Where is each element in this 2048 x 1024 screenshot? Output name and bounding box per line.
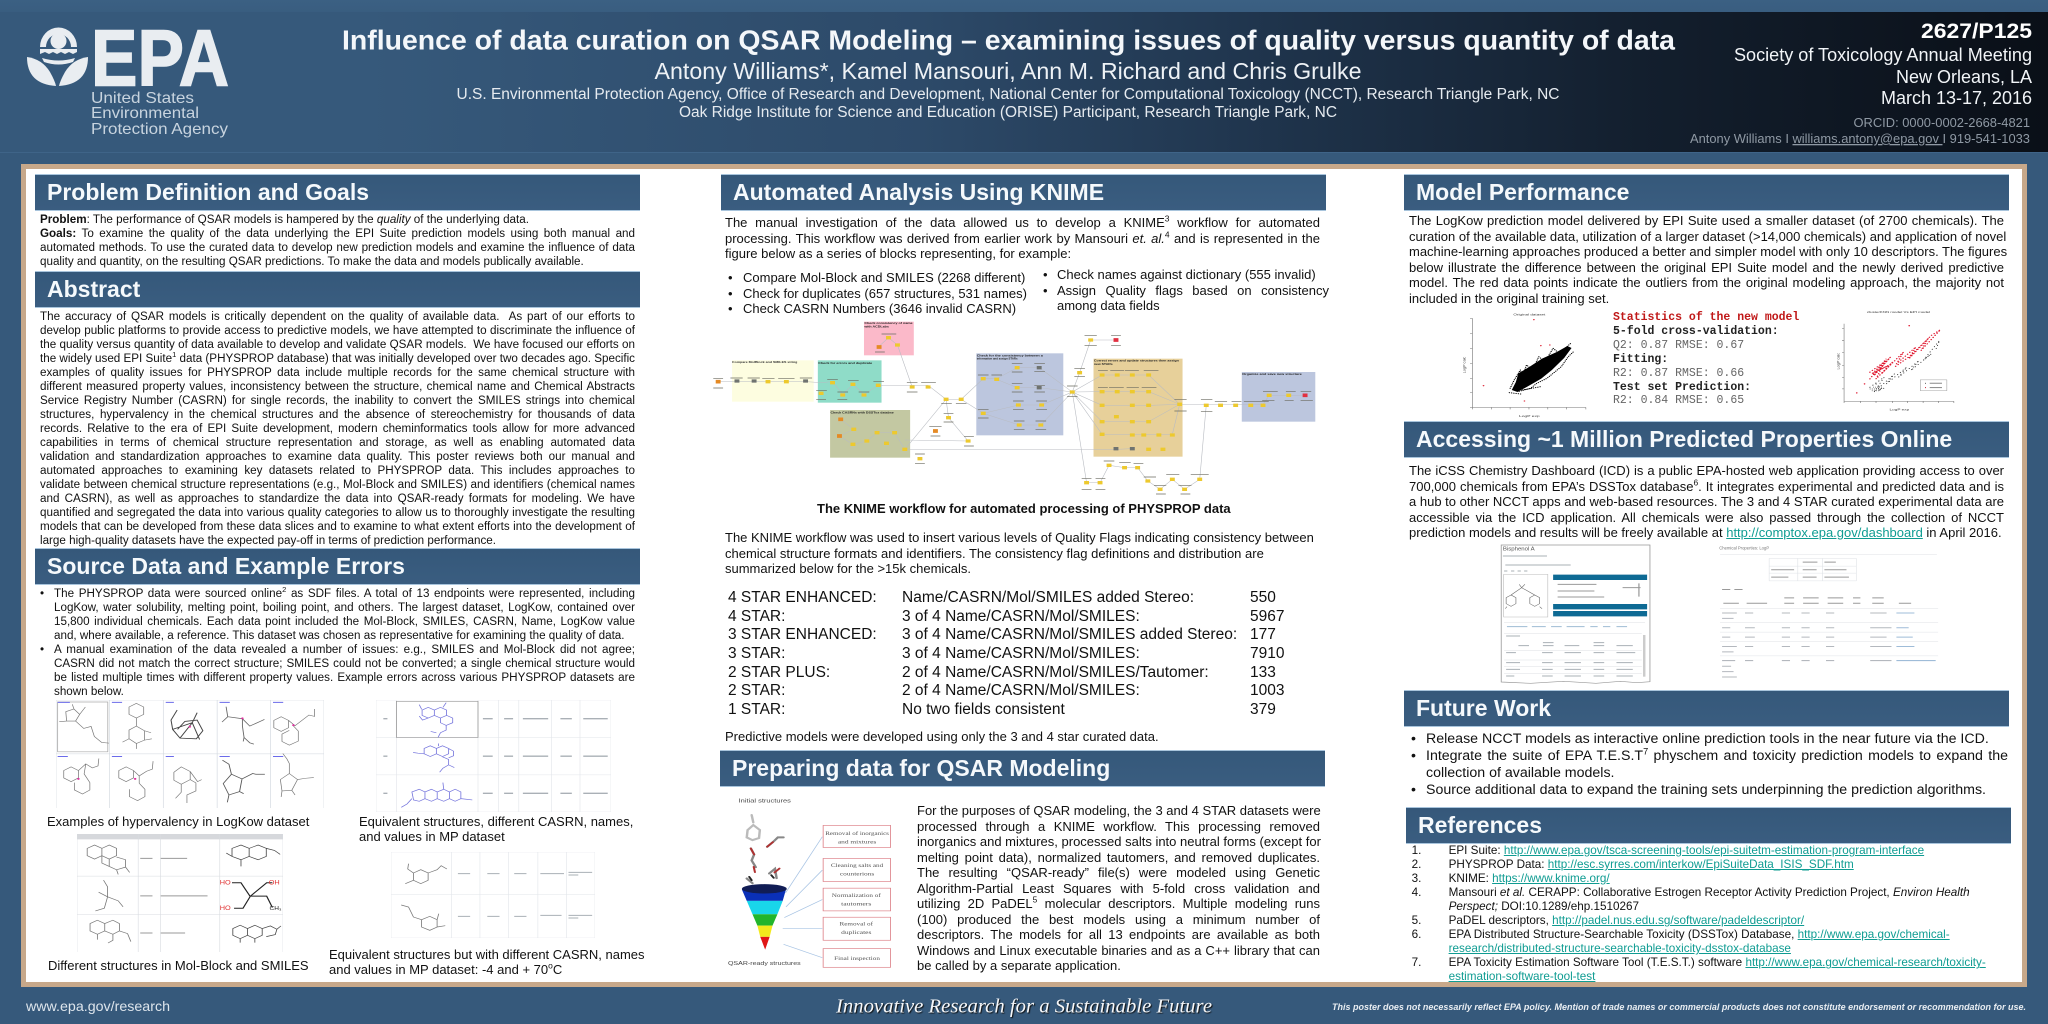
panel: preparing data for QSAR modeling — [720, 750, 1325, 973]
text: model performance: model. The red data points indicate the outliers from the original modeling approach, the majority not — [1409, 275, 2004, 290]
table: star ratings: 379 — [1250, 701, 1276, 718]
figure: QSAR funnel — [728, 798, 891, 968]
affiliations: U.S. Environmental Protection Agency, Office of Research and Development, National Center for Computational Toxicology (NCCT), Research Triangle Park, NC — [456, 86, 1560, 103]
panel: source data and example errors: • — [40, 587, 44, 600]
list: future work: Source additional data to expand the training sets underpinning the prediction algorithms. — [1426, 782, 1986, 798]
text: model performance: curation of the available data, utilization of a larger dataset (>14,000 chemicals) and application of novel — [1409, 229, 2006, 244]
text: source bullets: shown below. — [54, 685, 124, 698]
table: star ratings: 3 STAR: — [728, 645, 785, 662]
text: abstract: examples of quality issues for PHYSPROP data include multiple records for the same chemical structure with — [40, 366, 635, 379]
conference info — [1690, 20, 2032, 146]
caption: different values: and values in MP dataset: -4 and + 70oC — [329, 961, 562, 977]
heading: accessing properties: Accessing ~1 Million Predicted Properties Online — [1416, 426, 1952, 452]
agency name: United States — [91, 90, 194, 107]
contact details: Antony Williams I williams.antony@epa.gov I 919-541-1033 — [1690, 131, 2030, 146]
text: source bullets: be listed multiple times with different property values. Example errors across various PHYSPROP datasets are — [54, 671, 635, 684]
chart: original dataset scatter: LogP exp — [1519, 414, 1540, 418]
affiliations — [456, 86, 1560, 121]
text: abstract: the widely used EPI Suite1 data (PHYSPROP database) that was initially developed over two decades ago. Specific — [40, 350, 635, 365]
text: problem and goals: Problem: The performance of QSAR models is hampered by the quality of the underlying data. — [40, 213, 529, 226]
panel: automated analysis using KNIME: • — [728, 286, 733, 301]
panel: automated analysis using KNIME: • — [1043, 283, 1048, 298]
panel: automated analysis using KNIME — [713, 174, 1329, 744]
poster title and authors — [342, 24, 1676, 121]
panel: references: 1. — [1412, 844, 1421, 857]
panel: problem definition and goals — [35, 174, 640, 268]
header band — [0, 12, 2048, 153]
affiliations: Oak Ridge Institute for Science and Education (ORISE) Participant, Research Triangle Park, NC — [679, 104, 1337, 121]
figure: Mol-Block versus SMILES table: HO — [220, 880, 231, 886]
list: checks right — [1043, 267, 1329, 313]
text: abstract: automated approaches to examining key datasets related to PHYSPROP data. This includes approaches to — [40, 464, 635, 477]
caption: different values — [329, 946, 645, 977]
heading: model performance: Model Performance — [1416, 179, 1629, 205]
table: star ratings: 7910 — [1250, 645, 1284, 662]
workflow block: organize: Organize and save new structure — [1242, 372, 1302, 376]
text: abstract: Service Registry Number (CASRN) for single records, the inability to convert the SMILES strings into chemical — [40, 394, 635, 407]
stats: new model statistics: Statistics of the new model — [1613, 311, 1799, 324]
caption: Mol-Block versus SMILES: Different structures in Mol-Block and SMILES — [48, 958, 309, 973]
caption: hypervalency: Examples of hypervalency in LogKow dataset — [47, 814, 309, 828]
workflow block: correct errors — [1094, 359, 1183, 457]
text: source bullets — [40, 585, 635, 698]
figure: equivalent structures with different values — [391, 852, 595, 938]
list: references: estimation-software-tool-test — [1449, 970, 1595, 983]
text: problem and goals: quality and quantity, on the resulting QSAR predictions. To make the data and models publically available. — [40, 255, 584, 268]
EPA logo — [27, 20, 229, 138]
heading: KNIME: Automated Analysis Using KNIME — [733, 179, 1104, 205]
text: quality flags: summarized below for the >15k chemicals. — [725, 561, 971, 576]
meeting details: March 13-17, 2016 — [1881, 88, 2032, 108]
meeting details: New Orleans, LA — [1896, 67, 2032, 87]
heading: model performance — [1404, 174, 2009, 211]
text: abstract: validation and standardization approaches to examine data quality. This poster reviews both our manual and — [40, 450, 635, 463]
funnel label top: Initial structures — [739, 798, 791, 804]
text: problem and goals: Goals: To examine the quality of the data underlying the EPI Suite prediction models using both manual and — [40, 227, 635, 240]
funnel arrows — [783, 837, 822, 958]
workflow block: errors — [818, 360, 882, 403]
list: checks left: Check for duplicates (657 structures, 531 names) — [743, 286, 1027, 301]
text: model performance: The LogKow prediction model delivered by EPI Suite used a smaller dataset (of 2700 chemicals). The — [1409, 213, 2004, 228]
stats: new model statistics: 5-fold cross-validation: — [1613, 325, 1779, 338]
text: abstract: large high-quality datasets have the expected pay-off in terms of prediction performance. — [40, 534, 496, 547]
text: abstract: develop public platforms to provide access to predictive models, we have attempted to discriminate the influence of — [40, 324, 635, 337]
table: star ratings: 3 of 4 Name/CASRN/Mol/SMILES: — [902, 645, 1140, 662]
list: checks right: Assign Quality flags based on consistency — [1057, 283, 1329, 298]
step boxes — [823, 825, 891, 967]
text: abstract: capabilities in terms of chemical structure representation and storage, as well as enabling automated data — [40, 436, 635, 449]
text: KNIME introduction: processing. This workflow was derived from earlier work by Mansouri et. al.4 and is represented in the — [725, 229, 1320, 246]
table: star ratings: 2 STAR PLUS: — [728, 664, 830, 681]
panel: references: 3. — [1412, 872, 1421, 885]
step labels: and mixtures — [838, 839, 877, 845]
text: dashboard description: accessible via the ICD application. All chemicals were also passed through the collection of NCCT — [1409, 510, 2004, 525]
list: checks left: Check CASRN Numbers (3646 invalid CASRN) — [743, 301, 1016, 316]
meeting details — [1734, 45, 2032, 108]
text: model performance: machine-learning approaches produced a better and simpler model with only 10 descriptors. The figures — [1409, 244, 2007, 259]
list: references: EPA Toxicity Estimation Software Tool (T.E.S.T.) software http://www.epa.gov/chemical-research/toxicity- — [1449, 956, 1986, 969]
text: KNIME introduction: figure below as a series of blocks representing, for example: — [725, 246, 1071, 261]
main poster panel — [21, 164, 2027, 987]
step labels: Removal of inorganics — [825, 831, 890, 837]
text: dashboard description: prediction models and results will be freely available at http://comptox.epa.gov/dashboard in April 2016. — [1409, 525, 2002, 540]
stats: new model statistics: Q2: 0.87 RMSE: 0.67 — [1613, 339, 1744, 352]
stats: new model statistics: R2: 0.87 RMSE: 0.66 — [1613, 367, 1744, 380]
text: source bullets: A manual examination of the data revealed a number of issues: e.g., SMILES and Mol-Block did not agree; — [54, 643, 635, 656]
text: QSAR modeling description: (100) produced the best models using a minimum number of — [917, 912, 1320, 927]
step labels: duplicates — [841, 929, 872, 936]
chart: original dataset scatter: LogP calc — [1462, 356, 1467, 373]
chart: clusterKNN versus EPI scatter: LogP calc — [1836, 352, 1841, 370]
panel: references: 7. — [1412, 956, 1421, 969]
footer disclaimer: This poster does not necessarily reflect EPA policy. Mention of trade names or commercial products does not constitute endorsement or recommendation for use. — [1332, 1002, 2026, 1013]
caption: different values: Equivalent structures but with different CASRN, names — [329, 946, 645, 962]
text: QSAR modeling description: be called by a separate application. — [917, 958, 1121, 973]
list: references: KNIME: https://www.knime.org/ — [1449, 872, 1610, 885]
text: abstract: models that can be developed from these data slices and to examine to what extent efforts into the development of — [40, 520, 635, 533]
title: Influence of data curation on QSAR Modeling – examining issues of quality versus quantity of data — [342, 24, 1675, 56]
text: QSAR modeling description: melting point data), normalized tautomers, and removed duplicates. — [917, 850, 1320, 865]
text: abstract: validate between chemical structure representations (e.g., Mol-Block and SMILES) and identifiers (chemical names — [40, 478, 635, 491]
heading: preparing data: Preparing data for QSAR Modeling — [732, 755, 1110, 781]
heading: abstract: Abstract — [47, 276, 140, 302]
step labels: counterions — [840, 871, 875, 877]
stats: new model statistics: Fitting: — [1613, 353, 1668, 366]
contact details — [1690, 115, 2030, 146]
text: abstract: different measured property values, inconsistency between the structure, chemical name and Chemical Abstracts — [40, 380, 635, 393]
text: source bullets: and, where available, a reference. This dataset was chosen as representative for examining the quality of data. — [54, 629, 625, 642]
panel: source data and example errors — [35, 548, 645, 977]
chart: original dataset scatter — [1462, 313, 1586, 418]
text: QSAR modeling description: Windows and Linux executable binaries and as a C++ library that can — [917, 943, 1320, 958]
text: quality flags — [725, 530, 1314, 576]
chart: original dataset scatter: Original dataset — [1513, 313, 1545, 316]
workflow block: errors: Check for errors and duplicate — [818, 361, 872, 365]
list: references — [1412, 844, 1986, 983]
table: star ratings: 1003 — [1250, 682, 1284, 699]
step labels — [825, 831, 890, 962]
footer website: www.epa.gov/research — [25, 998, 170, 1014]
text: abstract: records. Relative to the era of EPI Suite development, modern cheminformatics tools allow for more advanced — [40, 422, 635, 435]
molecules — [747, 815, 784, 883]
table: chemical properties screenshot — [1719, 546, 1938, 678]
text: problem and goals: automated methods. To use the curated data to develop new prediction models and examine the influence of data — [40, 241, 635, 254]
table: star ratings: 3 of 4 Name/CASRN/Mol/SMILES: — [902, 608, 1140, 625]
caption: KNIME workflow: The KNIME workflow for automated processing of PHYSPROP data — [817, 501, 1231, 516]
table: star ratings: 3 of 4 Name/CASRN/Mol/SMILES added Stereo: — [902, 626, 1237, 643]
heading: abstract — [35, 271, 640, 308]
stats: new model statistics: R2: 0.84 RMSE: 0.65 — [1613, 394, 1744, 407]
text: abstract: structures, hypervalency in the chemical structures and the absence of stereochemistry for thousands of data — [40, 408, 635, 421]
text: model performance — [1409, 213, 2007, 306]
stats: new model statistics: Test set Prediction: — [1613, 381, 1751, 394]
text: source bullets: The PHYSPROP data were sourced online2 as SDF files. A total of 13 endpoints were represented, including — [54, 585, 635, 600]
panel: references: 5. — [1412, 914, 1421, 927]
figure: dashboard screenshot: Bisphenol A — [1503, 547, 1535, 552]
panel: accessing predicted properties online — [1404, 421, 2009, 684]
caption: equivalent structures: and values in MP dataset — [359, 829, 505, 844]
list: references: PaDEL descriptors, http://padel.nus.edu.sg/software/padeldescriptor/ — [1449, 914, 1804, 927]
table: star ratings: 2 of 4 Name/CASRN/Mol/SMILES: — [902, 682, 1140, 699]
text: abstract: and CASRN), as well as approaches to standardize the data into QSAR-ready formats for modeling. We have — [40, 492, 635, 505]
text: QSAR modeling description: utilizing 2D PaDEL5 molecular descriptors. Multiple modeling runs — [917, 895, 1320, 911]
workflow block: organize — [1242, 372, 1315, 422]
heading: source data — [35, 548, 640, 585]
step labels: Final inspection — [834, 955, 881, 962]
text: predictive models note: Predictive models were developed using only the 3 and 4 star curated data. — [725, 729, 1159, 744]
panel: automated analysis using KNIME: • — [728, 270, 733, 285]
panel: automated analysis using KNIME: • — [1043, 267, 1048, 282]
text: quality flags: The KNIME workflow was used to insert various levels of Quality Flags indicating consistency between — [725, 530, 1314, 545]
footer tagline: Innovative Research for a Sustainable Future — [835, 996, 1212, 1018]
authors: Antony Williams*, Kamel Mansouri, Ann M. Richard and Chris Grulke — [654, 58, 1362, 84]
workflow block: names — [863, 321, 914, 355]
text: dashboard description — [1409, 463, 2004, 540]
list: references: EPI Suite: http://www.epa.gov/tsca-screening-tools/epi-suitetm-estimation-program-interface — [1449, 844, 1924, 857]
table: star ratings: Name/CASRN/Mol/SMILES added Stereo: — [902, 589, 1194, 606]
list: future work: Integrate the suite of EPA T.E.S.T7 physchem and toxicity prediction models to expand the — [1426, 746, 2008, 764]
list: future work — [1411, 730, 2008, 798]
chart: clusterKNN versus EPI scatter — [1836, 310, 1954, 412]
step labels: Normalization of — [832, 893, 882, 899]
table: star ratings — [728, 589, 1284, 718]
table: star ratings: 4 STAR: — [728, 608, 785, 625]
step labels: Removal of — [839, 921, 874, 927]
panel: automated analysis using KNIME: • — [728, 301, 733, 316]
chart: KNIME workflow — [713, 321, 1316, 494]
list: references: Mansouri et al. CERAPP: Collaborative Estrogen Receptor Activity Prediction Project, Environ Health — [1449, 886, 1970, 899]
list: checks right: among data fields — [1057, 298, 1160, 313]
text: KNIME introduction: The manual investigation of the data allowed us to develop a KNIME3 workflow for automated — [725, 214, 1320, 230]
panel: model performance — [1404, 174, 2009, 418]
text: source bullets: 15,800 individual chemicals. Each data point included the Mol-Block, SMILES, CASRN, Name, LogKow value — [54, 615, 635, 628]
list: checks right: Check names against dictionary (555 invalid) — [1057, 267, 1316, 282]
table: star ratings: 1 STAR: — [728, 701, 785, 718]
panel: references: 6. — [1412, 928, 1421, 941]
heading: KNIME — [721, 174, 1326, 211]
heading: future work — [1404, 690, 2009, 727]
heading: problem — [35, 174, 640, 211]
list: checks left — [728, 270, 1027, 316]
icon: EPA flower — [27, 27, 88, 86]
figure: hypervalency structures — [56, 700, 324, 808]
agency name: Protection Agency — [91, 121, 228, 138]
stats: new model statistics — [1613, 311, 1799, 407]
funnel label bottom: QSAR-ready structures — [728, 961, 801, 967]
table: star ratings: 550 — [1250, 589, 1276, 606]
panel: source data and example errors: • — [40, 643, 44, 656]
text: dashboard description: a hub to other NCCT apps and web-based resources. The 3 and 4 STAR curated experimental data are — [1409, 494, 2004, 509]
list: future work: Release NCCT models as interactive online prediction tools in the near future via the ICD. — [1426, 730, 1989, 746]
list: future work: collection of available models. — [1426, 764, 1614, 780]
workflow block: consistency — [976, 353, 1063, 435]
figure: Mol-Block versus SMILES table: CH₃ — [270, 907, 282, 912]
heading: future work: Future Work — [1416, 695, 1551, 721]
table: star ratings: 133 — [1250, 664, 1276, 681]
table: star ratings: 2 STAR: — [728, 682, 785, 699]
panel: future work: • — [1411, 782, 1416, 798]
workflow block: names: Check consistency of name — [864, 321, 913, 325]
list: checks left: Compare Mol-Block and SMILES (2268 different) — [743, 270, 1025, 285]
list: references: research/distributed-structure-searchable-toxicity-dsstox-database — [1449, 942, 1791, 955]
figure: dashboard screenshot — [1500, 544, 1650, 684]
funnel — [742, 884, 787, 950]
heading: source data: Source Data and Example Errors — [47, 553, 405, 579]
workflow block: names: with ACDLabs — [863, 325, 889, 328]
panel: references: 4. — [1412, 886, 1421, 899]
step labels: tautomers — [841, 901, 872, 907]
text: abstract: the quality versus quantity of data available to develop and validate QSAR models. We have focused our efforts on — [40, 338, 635, 351]
table: star ratings: 177 — [1250, 626, 1276, 643]
panel: references: 2. — [1412, 858, 1421, 871]
panel: abstract — [35, 271, 640, 547]
figure: Mol-Block versus SMILES table: HO — [220, 906, 231, 912]
table: star ratings: 5967 — [1250, 608, 1284, 625]
chart: clusterKNN versus EPI scatter: LogP exp — [1890, 408, 1909, 412]
panel: references — [1406, 807, 2011, 983]
caption: equivalent structures — [359, 814, 633, 844]
workflow block: correct errors: new STARs — [1094, 362, 1113, 366]
text: KNIME introduction — [725, 214, 1320, 261]
workflow block: consistency: Check for the consistency between a — [977, 354, 1043, 357]
text: abstract: The accuracy of QSAR models is critically dependent on the quality of available data. As part of our efforts to — [40, 310, 635, 323]
panel: future work: • — [1411, 730, 1416, 746]
panel: future work — [1404, 690, 2009, 798]
list: references: Perspect; DOI:10.1289/ehp.1510267 — [1449, 900, 1639, 913]
chart: clusterKNN versus EPI scatter: clusterKNN model Vs EPI model — [1867, 310, 1930, 314]
text: QSAR modeling description: descriptors. The models for all 13 endpoints are available as both — [917, 927, 1320, 942]
text: QSAR modeling description: The resulting “QSAR-ready” file(s) were modeled using Genetic — [917, 865, 1320, 880]
list: references: EPA Distributed Structure-Searchable Toxicity (DSSTox) Database, http://www.epa.gov/chemical- — [1449, 928, 1950, 941]
agency name: Environmental — [91, 105, 199, 122]
contact details: ORCID: 0000-0002-2668-4821 — [1854, 115, 2030, 130]
table: chemical properties screenshot: Chemical Properties: LogP — [1719, 546, 1769, 551]
figure: Mol-Block versus SMILES table: OH — [269, 880, 280, 886]
text: QSAR modeling description: Algorithm-Partial Least Squares with 5-fold cross validation and — [917, 881, 1320, 896]
text: quality flags: chemical structure formats and identifiers. The consistency flag definitions and distribution are — [725, 546, 1264, 561]
footer — [25, 996, 2026, 1018]
text: model performance: included in the original training set. — [1409, 291, 1609, 306]
text: model performance: below illustrate the difference between the original EPI Suite model and the newly derived predictive — [1409, 260, 2004, 275]
table: star ratings: 3 STAR ENHANCED: — [728, 626, 877, 643]
text: QSAR modeling description — [917, 803, 1321, 973]
text: QSAR modeling description: For the purposes of QSAR modeling, the 3 and 4 STAR datasets were — [917, 803, 1321, 818]
text: problem and goals — [40, 213, 635, 268]
table: star ratings: 2 of 4 Name/CASRN/Mol/SMILES/Tautomer: — [902, 664, 1209, 681]
heading: references: References — [1418, 812, 1542, 838]
step labels: Cleaning salts and — [831, 863, 884, 869]
workflow block: correct errors: Correct errors and update structures then assign — [1094, 359, 1179, 363]
workflow block: compare: Compare MolBlock and SMILES string — [732, 360, 797, 364]
text: dashboard description: 700,000 chemicals from EPA’s DSSTox database6. It integrates experimental and predicted data and is — [1409, 477, 2004, 494]
caption: equivalent structures: Equivalent structures, different CASRN, names, — [359, 814, 633, 828]
workflow block: CASRN: Check CASRNs with DSSTox databse — [830, 411, 894, 415]
workflow block: CASRN — [830, 410, 910, 458]
figure: equivalent structures table — [376, 700, 611, 812]
agency name — [91, 90, 228, 138]
heading: problem: Problem Definition and Goals — [47, 179, 369, 205]
heading: references — [1406, 807, 2011, 844]
table: star ratings: 4 STAR ENHANCED: — [728, 589, 877, 606]
heading: accessing properties — [1404, 421, 2009, 458]
figure: Mol-Block versus SMILES table — [77, 834, 283, 952]
panel: future work: • — [1411, 748, 1416, 764]
workflow block: compare — [732, 360, 814, 402]
table: star ratings: No two fields consistent — [902, 701, 1065, 718]
text: dashboard description: The iCSS Chemistry Dashboard (ICD) is a public EPA-hosted web application providing access to over — [1409, 463, 2004, 478]
meeting details: Society of Toxicology Annual Meeting — [1734, 45, 2032, 65]
text: abstract: quantified and segregated the data into various quality categories to allow us to thoroughly investigate the resulting — [40, 506, 635, 519]
poster number: 2627/P125 — [1921, 20, 2032, 43]
heading: preparing data — [720, 750, 1325, 787]
text: abstract — [40, 310, 635, 547]
text: source bullets: CASRN did not match the correct structure; SMILES could not be converted; a single chemical structure would — [54, 657, 635, 670]
text: source bullets: LogKow, water solubility, melting point, boiling point, and others. The largest dataset, LogKow, contained over — [54, 601, 635, 614]
workflow block: consistency: information and assign STARs — [977, 357, 1018, 361]
text: QSAR modeling description: processed through a KNIME workflow. This processing removed — [917, 819, 1320, 834]
list: references: PHYSPROP Data: http://esc.syrres.com/interkow/EpiSuiteData_ISIS_SDF.htm — [1449, 858, 1854, 871]
text: QSAR modeling description: inorganics and mixtures, processed salts into neutral forms (except for — [917, 834, 1321, 849]
